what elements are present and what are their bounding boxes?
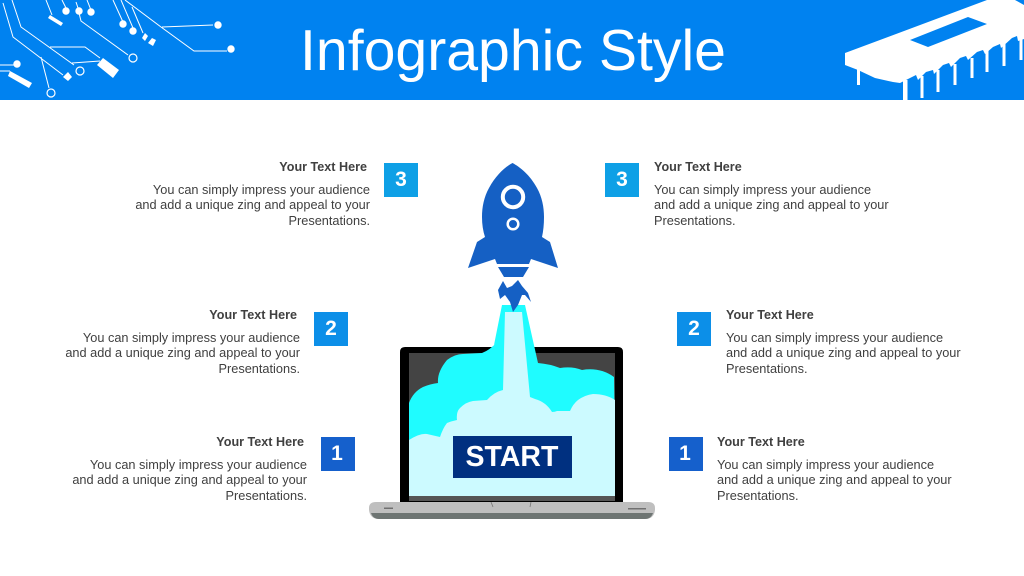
callout: left step 1: You can simply impress your audience	[90, 457, 307, 472]
callout: left step 3: Presentations.	[288, 213, 370, 228]
callout: left step 1: and add a unique zing and appeal to your	[72, 472, 307, 487]
badge: left 3	[384, 163, 418, 197]
badge: right 2	[677, 312, 711, 346]
icon: circuit traces	[0, 0, 235, 98]
callout: right step 1: You can simply impress your audience	[717, 457, 934, 472]
laptop screen	[400, 347, 623, 502]
callout: right step 3: Your Text Here	[654, 160, 742, 174]
badge: right 1: 1	[679, 442, 691, 465]
callout: left step 3: Your Text Here	[279, 160, 367, 174]
callout: left step 3: You can simply impress your audience	[153, 182, 370, 197]
callout: left step 3: and add a unique zing and appeal to your	[135, 197, 370, 212]
callout: right step 2: Presentations.	[726, 361, 808, 376]
rocket	[468, 163, 558, 312]
callout: right step 1: Your Text Here	[717, 435, 805, 449]
callout: right step 3	[654, 160, 889, 228]
callout: left step 2	[65, 308, 300, 376]
callout: right step 3: Presentations.	[654, 213, 736, 228]
icon: microchip	[845, 0, 1024, 100]
badge: right 1	[669, 437, 703, 471]
badge: right 2: 2	[688, 317, 700, 340]
badge: left 1	[321, 437, 355, 471]
callout: left step 1	[72, 435, 307, 503]
callout: left step 2: and add a unique zing and appeal to your	[65, 345, 300, 360]
callout: left step 3	[135, 160, 370, 228]
callout: right step 1: Presentations.	[717, 488, 799, 503]
callout: right step 3: You can simply impress your audience	[654, 182, 871, 197]
badge: left 2: 2	[325, 317, 337, 340]
callout: right step 2	[726, 308, 961, 376]
callout: right step 1	[717, 435, 952, 503]
callout: right step 3: and add a unique zing and appeal to your	[654, 197, 889, 212]
callout: right step 2: You can simply impress your audience	[726, 330, 943, 345]
badge: left 3: 3	[395, 168, 407, 191]
start label: START	[466, 441, 558, 473]
badge: right 3	[605, 163, 639, 197]
header band	[0, 0, 1024, 100]
callout: right step 2: Your Text Here	[726, 308, 814, 322]
start label	[452, 436, 572, 478]
badge: right 3: 3	[616, 168, 628, 191]
badge: left 1: 1	[331, 442, 343, 465]
callout: left step 2: Your Text Here	[209, 308, 297, 322]
title: Infographic Style	[300, 19, 726, 83]
callout: left step 1: Your Text Here	[216, 435, 304, 449]
callout: left step 2: Presentations.	[218, 361, 300, 376]
callout: right step 1: and add a unique zing and appeal to your	[717, 472, 952, 487]
badge: left 2	[314, 312, 348, 346]
rocket flame	[498, 280, 531, 312]
laptop base	[369, 502, 655, 519]
callout: right step 2: and add a unique zing and appeal to your	[726, 345, 961, 360]
callout: left step 2: You can simply impress your audience	[83, 330, 300, 345]
callout: left step 1: Presentations.	[225, 488, 307, 503]
smoke clouds	[409, 305, 615, 501]
